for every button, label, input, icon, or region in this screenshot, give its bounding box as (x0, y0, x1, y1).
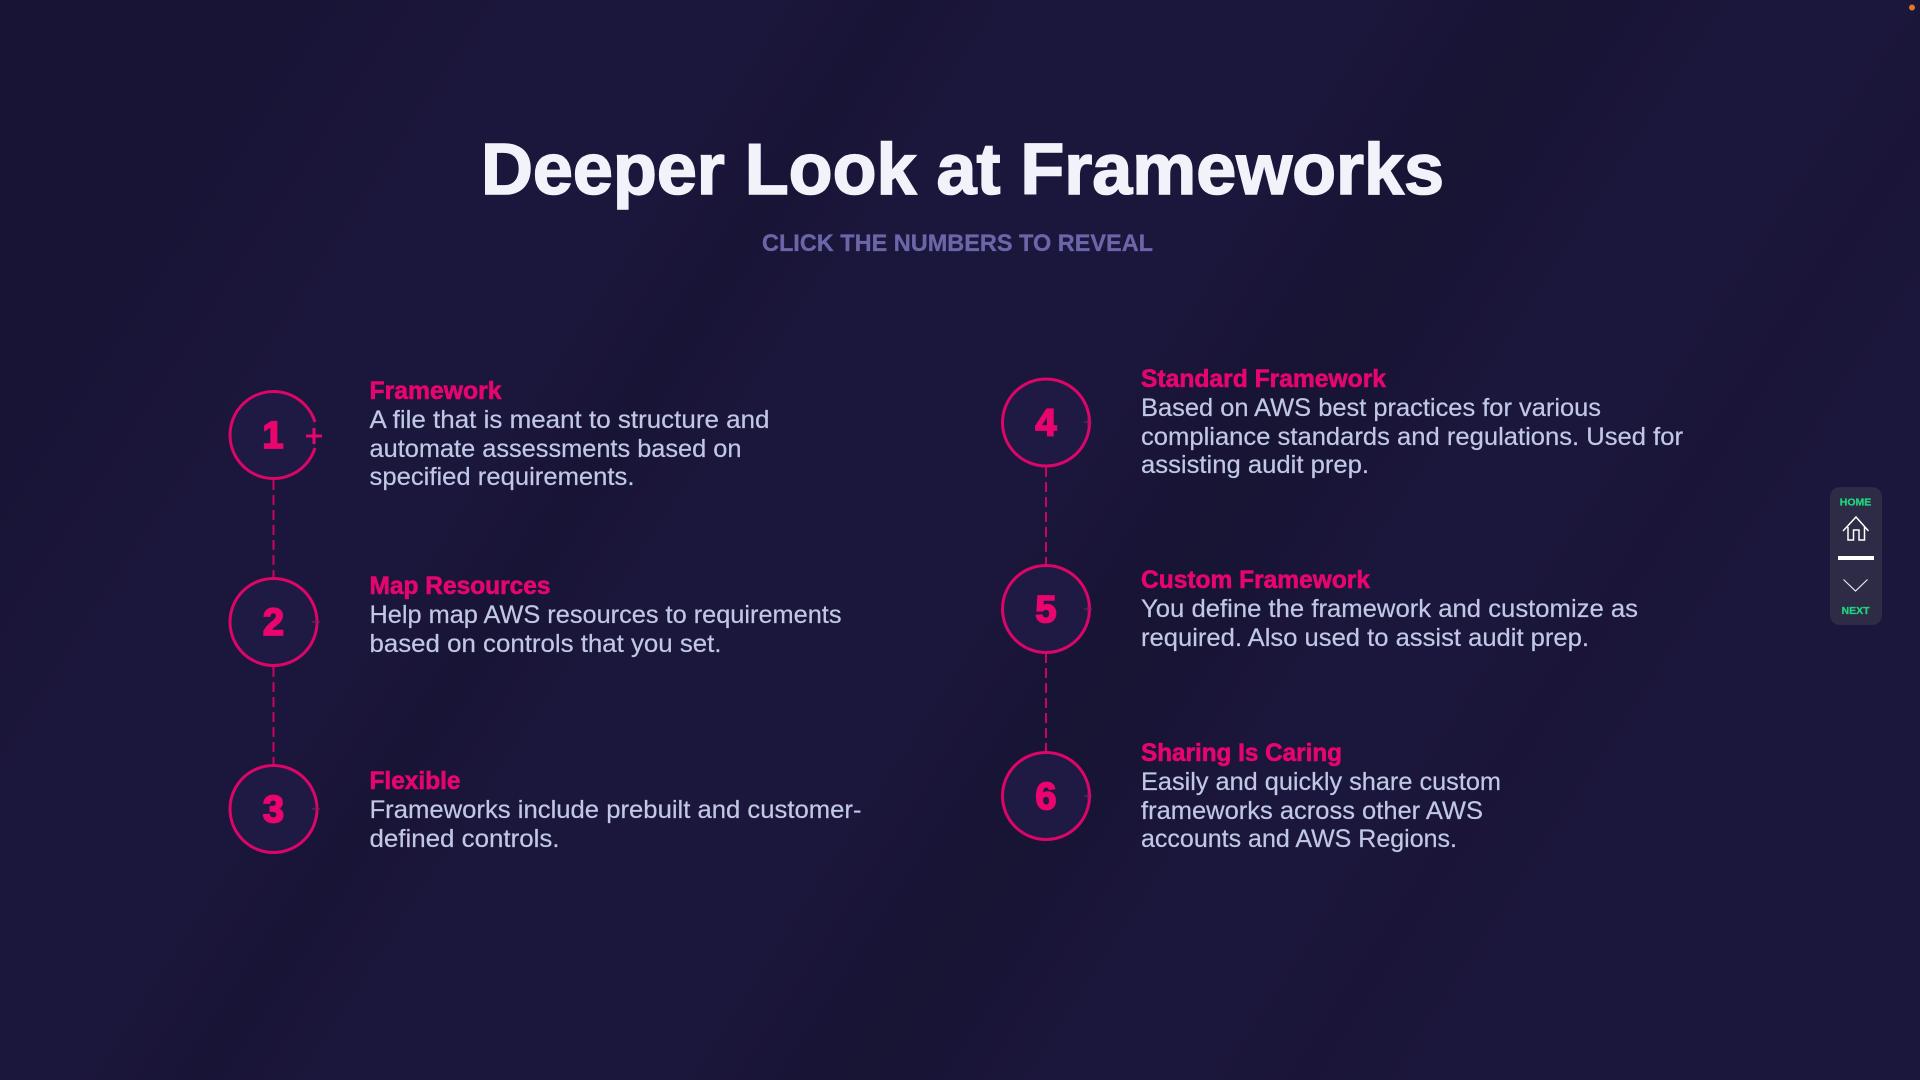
step 2 text: based on controls that you set. (370, 630, 722, 658)
divider bar (1838, 556, 1874, 560)
step 3 text: Flexible (370, 767, 461, 795)
step 4 marker (1002, 379, 1092, 466)
step 6 text (1141, 739, 1501, 853)
step 3 text (370, 767, 862, 853)
icon: house (1843, 517, 1868, 540)
step 5 text (1141, 566, 1638, 652)
icon: plus (306, 428, 322, 444)
step 3 text: defined controls. (370, 825, 560, 853)
connector: 2 to 3 (272, 667, 274, 765)
connector: 1 to 2 (272, 480, 274, 578)
title: Deeper Look at Frameworks (481, 130, 1444, 210)
step 4 text: Based on AWS best practices for various (1141, 394, 1601, 422)
step 5 text: You define the framework and customize as (1141, 595, 1638, 623)
step 1 text (370, 377, 770, 491)
step 1 marker: 1 (262, 415, 284, 457)
connector: 4 to 5 (1045, 467, 1047, 565)
connector: 5 to 6 (1045, 653, 1047, 752)
step 1 text: A file that is meant to structure and (370, 406, 770, 434)
step 1 text: automate assessments based on (370, 435, 742, 463)
step 1 marker (230, 391, 322, 479)
step 4 text: compliance standards and regulations. Used for (1141, 423, 1683, 451)
step 1 text: Framework (370, 377, 502, 405)
step 2 text: Map Resources (370, 572, 550, 600)
step 1 text: specified requirements. (370, 463, 634, 491)
step 5 marker: 5 (1035, 589, 1057, 631)
icon: chevron down (1844, 580, 1868, 591)
step 3 text: Frameworks include prebuilt and customer- (370, 796, 862, 824)
step 5 marker (1002, 566, 1092, 652)
step 2 text: Help map AWS resources to requirements (370, 601, 842, 629)
step 6 marker: 6 (1035, 776, 1057, 818)
step 2 marker: 2 (263, 602, 284, 644)
step 3 marker (230, 766, 320, 852)
step 4 text: assisting audit prep. (1141, 451, 1369, 479)
step 3 marker: 3 (263, 789, 284, 831)
step 2 marker (230, 578, 320, 666)
step 6 marker (1002, 752, 1092, 840)
step 6 text: frameworks across other AWS (1141, 797, 1483, 825)
step 4 text (1141, 365, 1683, 479)
step 6 text: Sharing Is Caring (1141, 739, 1342, 767)
navigation panel (1830, 487, 1882, 625)
step 4 text: Standard Framework (1141, 365, 1386, 393)
nav label: next: NEXT (1841, 605, 1870, 617)
step 5 text: required. Also used to assist audit prep. (1141, 624, 1589, 652)
nav label: home: HOME (1840, 496, 1871, 508)
step 6 text: Easily and quickly share custom (1141, 768, 1501, 796)
subtitle: CLICK THE NUMBERS TO REVEAL (762, 230, 1153, 257)
step 2 text (370, 572, 842, 658)
step 4 marker: 4 (1035, 402, 1057, 444)
step 5 text: Custom Framework (1141, 566, 1370, 594)
status dot (1909, 4, 1915, 10)
step 6 text: accounts and AWS Regions. (1141, 825, 1457, 853)
